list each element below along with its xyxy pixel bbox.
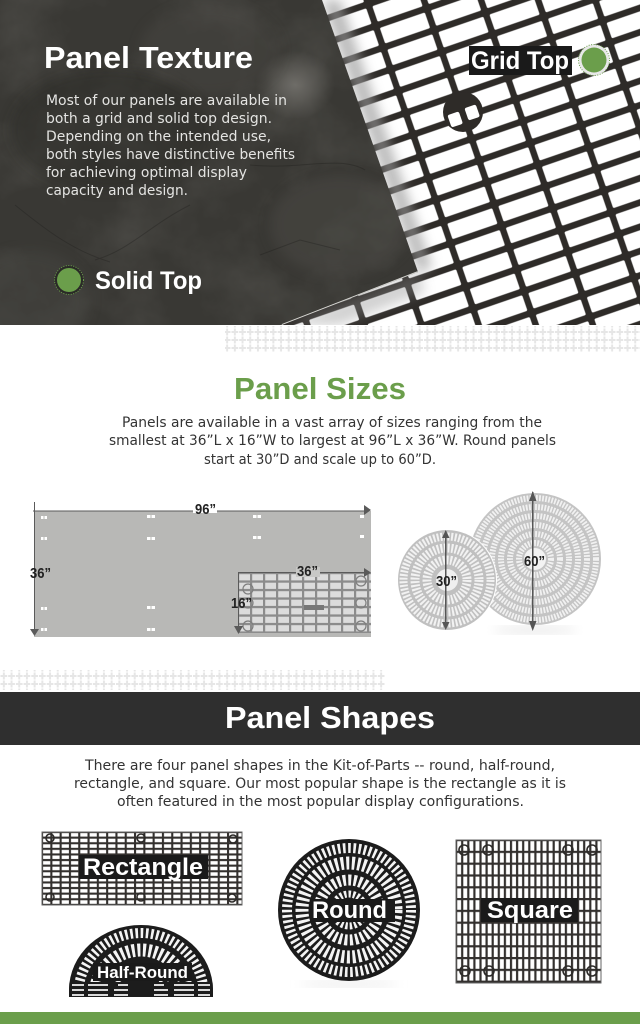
label: grid top: Grid Top (471, 47, 569, 75)
text block: sizes intro (109, 415, 556, 468)
text block: shapes intro: rectangle, and square. Our most popular shape is the rectangle as it is (74, 776, 566, 792)
title: panel texture: Panel Texture (44, 40, 253, 75)
text block: texture intro: for achieving optimal display (46, 165, 247, 181)
text block: shapes intro (74, 758, 566, 810)
text block: texture intro: Most of our panels are available in (46, 93, 287, 109)
dimension arrows (30, 502, 371, 636)
dimension labels (30, 502, 320, 612)
label: half-round: Half-Round (97, 963, 188, 982)
text block: sizes intro: start at 30”D and scale up to 60”D. (204, 452, 436, 468)
band: panel shapes heading (0, 692, 640, 745)
large panel 96 by 36 (34, 511, 371, 637)
grid top photo (282, 0, 640, 325)
text block: shapes intro: often featured in the most popular display configurations. (117, 794, 524, 810)
footer bar (0, 1012, 640, 1024)
text block: texture intro: both a grid and solid top design. (46, 111, 272, 127)
text block: sizes intro: smallest at 36”L x 16”W to largest at 96”L x 36”W. Round panels (109, 433, 556, 449)
icon: grid top marker (578, 44, 610, 76)
label: round: Round (312, 897, 387, 924)
shape: square (456, 840, 601, 983)
text block: sizes intro: Panels are available in a vast array of sizes ranging from the (122, 415, 542, 431)
dimension labels: 36” (297, 564, 318, 580)
band: panel shapes heading: Panel Shapes (225, 700, 435, 735)
shape: rectangle (42, 832, 242, 905)
label: rectangle: Rectangle (83, 854, 203, 881)
solid top photo (0, 0, 430, 350)
shape: round (278, 839, 420, 987)
label: square: Square (487, 897, 573, 924)
text block: texture intro: capacity and design. (46, 183, 188, 199)
diameter arrows (442, 491, 536, 631)
small panel 36 by 16 (238, 573, 371, 633)
round panel 30 inch (397, 529, 497, 631)
text block: texture intro: Depending on the intended use, (46, 129, 271, 145)
diameter labels: 30” (436, 574, 457, 590)
heading: panel sizes: Panel Sizes (234, 371, 406, 406)
chart: round panel dimensions (397, 491, 601, 634)
dimension labels: 36” (30, 566, 51, 582)
dimension labels: 96” (195, 502, 216, 518)
panel: texture hero (0, 0, 640, 350)
label: solid top: Solid Top (95, 267, 202, 295)
text block: texture intro: both styles have distinctive benefits (46, 147, 295, 163)
chart: rectangular panel dimensions (30, 502, 371, 637)
text block: texture intro (46, 93, 295, 199)
icon: solid top marker (54, 266, 84, 294)
diameter labels (436, 554, 545, 590)
shape: half-round (69, 925, 213, 997)
dimension labels: 16” (231, 596, 252, 612)
round panel 60 inch (469, 493, 601, 634)
diameter labels: 60” (524, 554, 545, 570)
text block: shapes intro: There are four panel shapes in the Kit-of-Parts -- round, half-round, (84, 758, 555, 774)
